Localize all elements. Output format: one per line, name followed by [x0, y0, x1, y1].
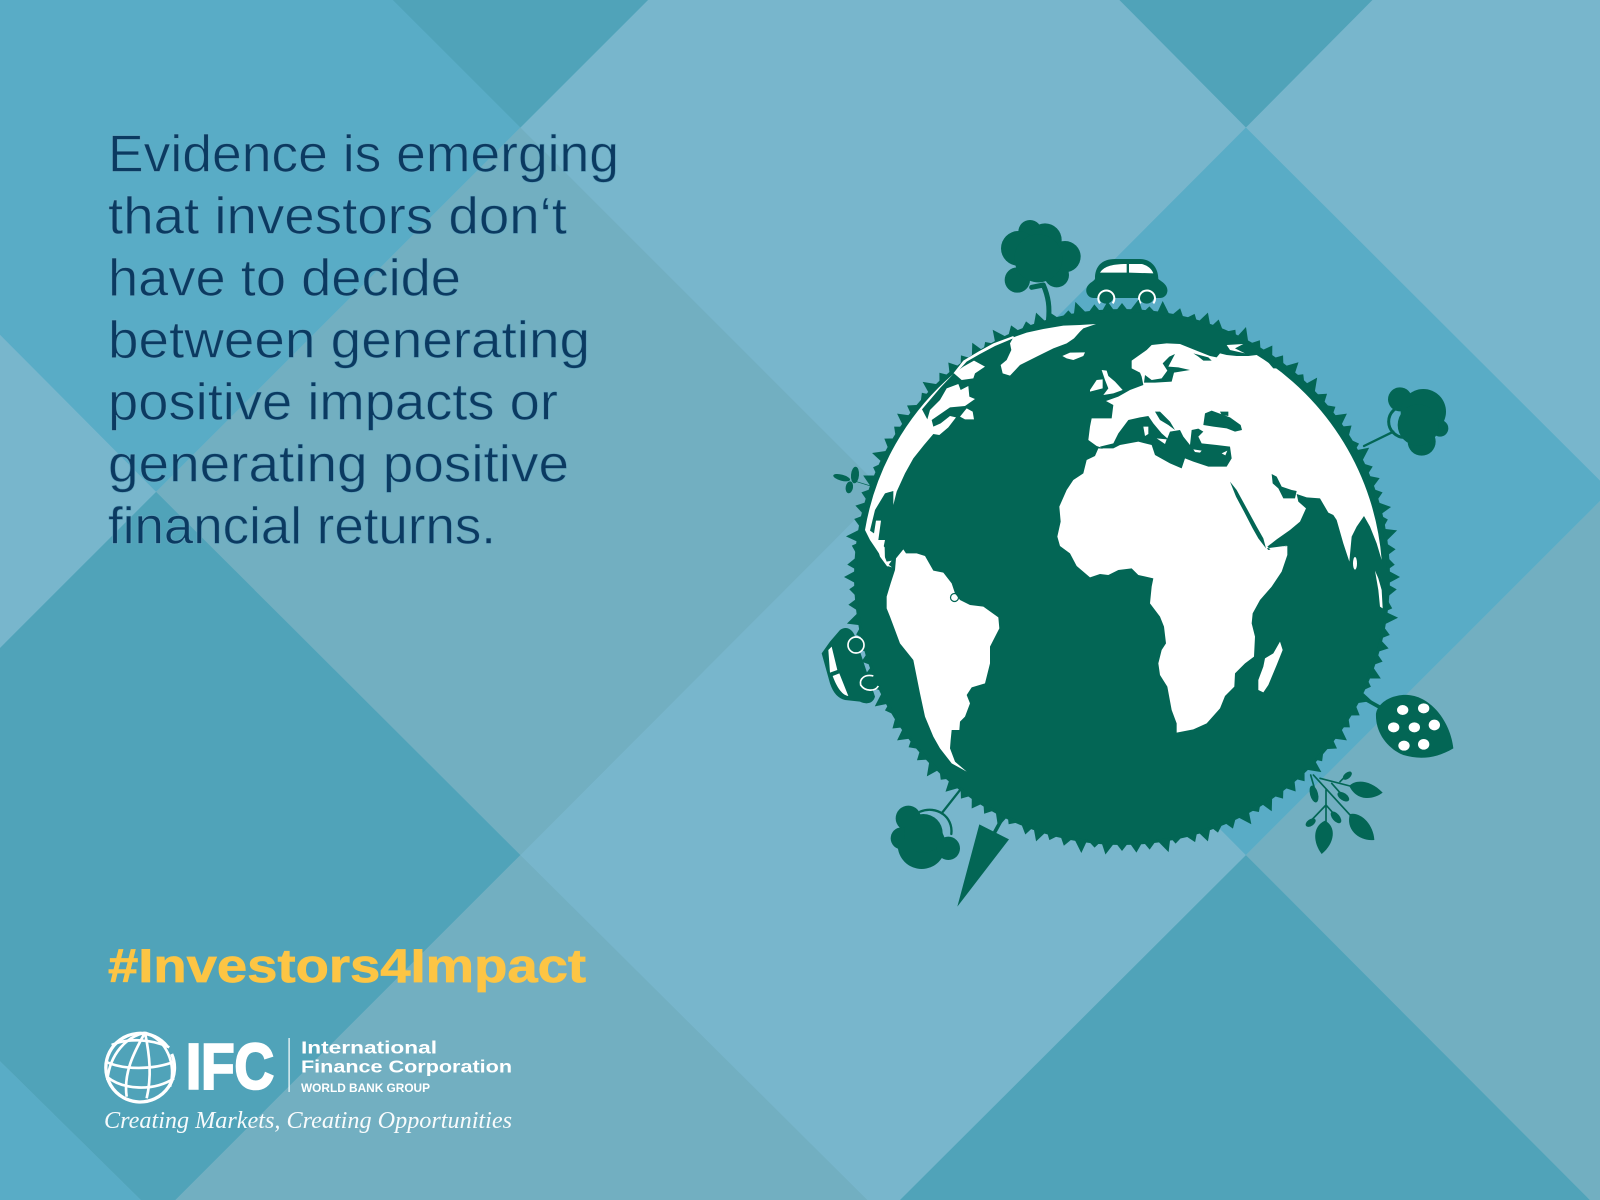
headline text: between generating — [108, 312, 590, 370]
Novaya Zemlya — [1227, 344, 1245, 353]
car on top of globe — [1086, 259, 1167, 304]
IFC letters: IFC — [186, 1030, 274, 1102]
organisation name: International — [301, 1038, 437, 1058]
United Kingdom — [1102, 370, 1123, 395]
continents — [865, 324, 1383, 772]
headline text — [108, 126, 619, 556]
organisation name: Finance Corporation — [301, 1056, 512, 1076]
right tree — [1364, 387, 1448, 456]
Mediterranean, Black Sea, Red Sea, Gulf and Baltic — [1100, 353, 1297, 548]
South America — [875, 540, 999, 772]
Eurasia — [1088, 343, 1383, 608]
tree on top of globe — [1001, 220, 1081, 322]
South-East Asia sliver — [1375, 571, 1383, 608]
headline text: financial returns. — [108, 498, 496, 556]
left car — [822, 628, 878, 703]
Guiana ring — [950, 594, 958, 602]
jagged green planet body — [809, 260, 1435, 894]
tagline: Creating Markets, Creating Opportunities — [104, 1108, 512, 1134]
small sprout on left — [833, 466, 871, 494]
headline text: Evidence is emerging — [108, 126, 619, 184]
icon: IFC globe — [106, 1033, 175, 1102]
headline text: positive impacts or — [108, 374, 558, 432]
Madagascar — [1258, 642, 1283, 692]
organisation name: WORLD BANK GROUP — [301, 1083, 430, 1095]
headline text: have to decide — [108, 250, 461, 308]
headline text: that investors don‘t — [108, 188, 568, 246]
Sri Lanka — [1353, 557, 1357, 570]
North America and Greenland — [865, 324, 1096, 567]
globe illustration — [809, 220, 1453, 907]
hashtag: #Investors4Impact — [108, 939, 586, 992]
bottom-left tree — [891, 787, 963, 869]
Africa — [1057, 442, 1287, 733]
Ireland — [1090, 379, 1103, 392]
headline text: generating positive — [108, 436, 569, 494]
Mediterranean islands — [1143, 427, 1227, 455]
organisation name — [301, 1038, 512, 1095]
leaf with white dots — [1361, 695, 1453, 758]
IFC logo — [104, 1030, 512, 1134]
seas overlaid on land — [950, 353, 1297, 602]
carrot — [957, 813, 1009, 907]
leafy branch — [1304, 770, 1383, 854]
